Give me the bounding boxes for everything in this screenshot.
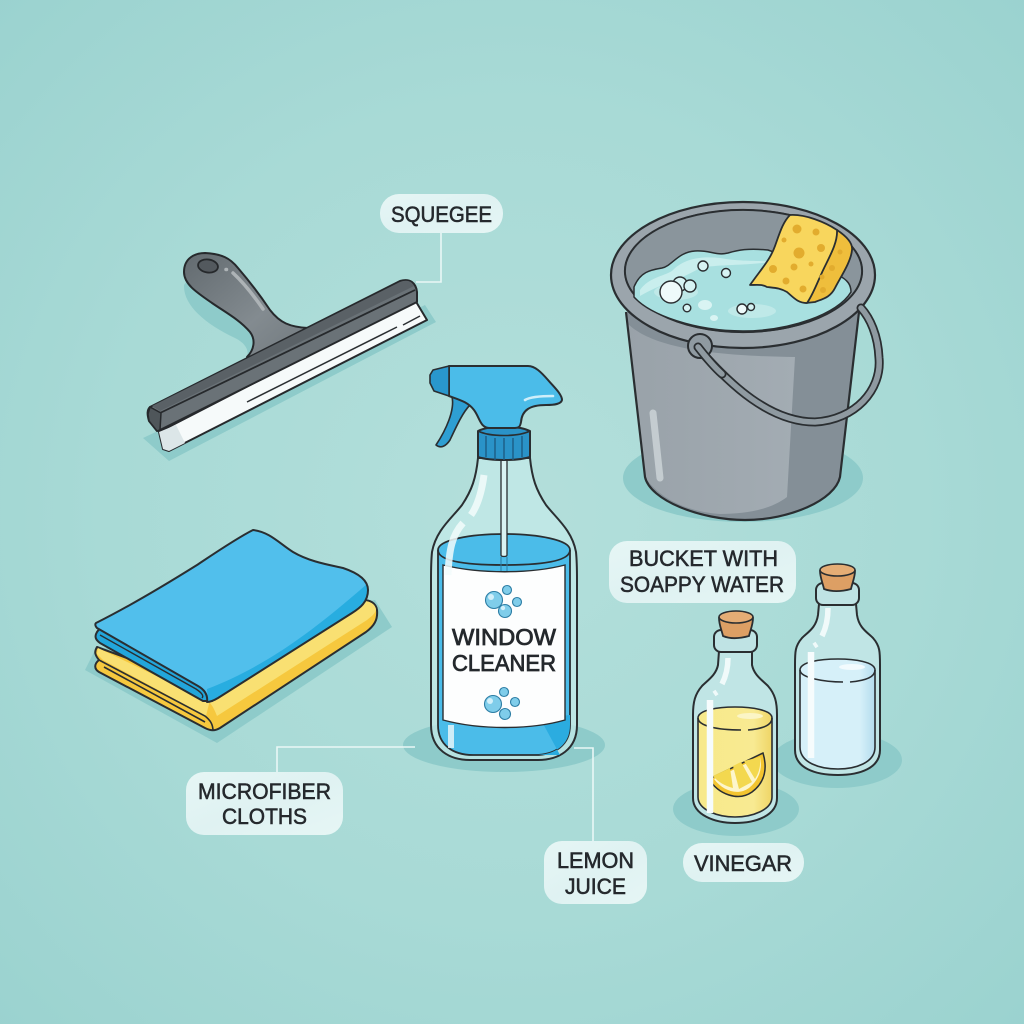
bottle shadows	[772, 732, 902, 788]
yellow cloth	[95, 600, 377, 730]
bucket outline	[626, 312, 859, 520]
label: squeegee	[380, 194, 503, 233]
squeegee channel	[148, 280, 417, 431]
leader lines	[277, 233, 593, 841]
blue cloth fold edge	[96, 628, 212, 701]
bottle glass	[431, 458, 577, 760]
item: window cleaner spray bottle	[403, 366, 605, 772]
handle highlight	[226, 270, 263, 309]
item: microfiber cloths	[85, 530, 392, 743]
head highlight	[525, 396, 553, 400]
item: lemon juice and vinegar bottles	[673, 564, 902, 836]
label bubbles	[484, 586, 522, 720]
trigger	[436, 397, 482, 447]
item: squeegee	[143, 253, 436, 461]
sponge holes	[769, 224, 842, 293]
label: microfiber cloths: CLOTHS	[222, 804, 307, 829]
bottle shadow	[403, 718, 605, 772]
handle hole	[197, 258, 219, 274]
spray head	[449, 366, 562, 428]
label: lemon juice: LEMON	[557, 848, 634, 873]
dip tube	[501, 458, 507, 556]
label: lemon juice: JUICE	[565, 874, 626, 899]
label: bucket with soapy water: BUCKET WITH	[629, 546, 778, 571]
label text: WINDOW	[452, 624, 556, 650]
blue cloth top	[95, 530, 368, 702]
bottle collar	[478, 426, 530, 460]
blue cloth outline	[95, 530, 368, 702]
lemon slice	[709, 753, 765, 796]
bucket light panel	[628, 324, 795, 514]
blue cloth shade	[207, 584, 368, 702]
bucket body	[626, 312, 859, 520]
liquid	[438, 534, 570, 755]
sponge	[750, 215, 852, 303]
bucket shadow	[623, 434, 863, 522]
yellow cloth light band	[97, 601, 376, 716]
foam patches	[728, 304, 776, 318]
squeegee handle	[184, 253, 330, 382]
bucket rim	[611, 202, 875, 348]
label: CLEANER	[452, 650, 556, 676]
label: microfiber cloths: MICROFIBER	[198, 779, 331, 804]
clear bottle	[795, 564, 880, 775]
soapy water	[634, 249, 851, 331]
label: bucket with soapy water: SOAPPY WATER	[620, 572, 784, 597]
sponge back piece	[806, 230, 852, 303]
label: vinegar	[683, 843, 804, 882]
squeegee shadow	[143, 270, 436, 461]
cloth shadow	[85, 600, 392, 743]
bucket handle	[688, 308, 879, 422]
nozzle	[430, 366, 449, 396]
label: bucket with soapy water	[609, 541, 796, 603]
label: vinegar: VINEGAR	[694, 851, 792, 876]
label: squeegee: SQUEGEE	[391, 202, 492, 227]
bucket interior	[625, 210, 862, 332]
item: bucket with soapy water	[611, 202, 879, 522]
label: microfiber cloths	[186, 772, 343, 835]
label	[443, 565, 565, 728]
lemon juice bottle	[693, 611, 777, 823]
squeegee blade	[159, 300, 427, 451]
glass highlights	[448, 475, 484, 575]
label: lemon juice	[544, 841, 647, 904]
sponge front piece	[750, 215, 837, 303]
bucket highlight	[653, 413, 660, 478]
bubbles	[660, 261, 754, 314]
